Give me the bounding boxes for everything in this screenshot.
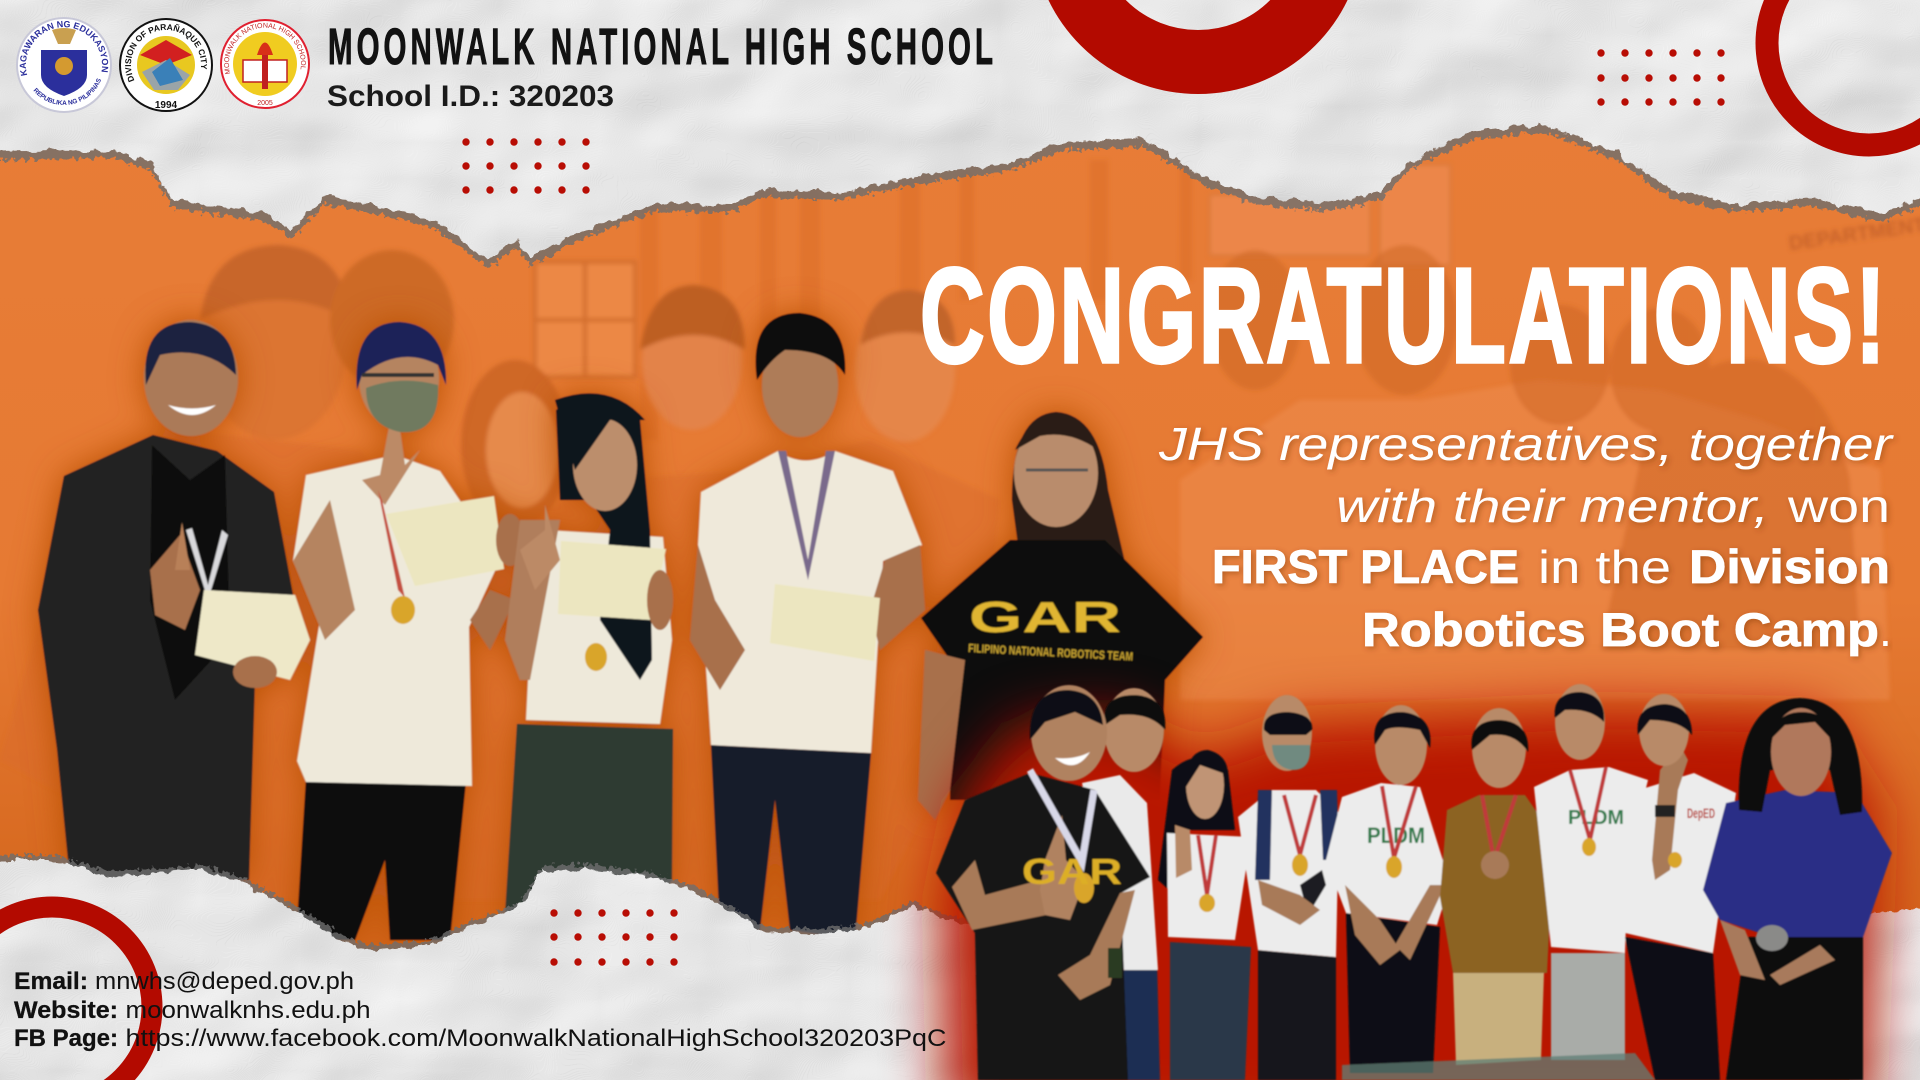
logo: DepEd seal xyxy=(16,17,112,113)
announcement text: in the xyxy=(1538,541,1671,593)
left photo: five winners with certificates xyxy=(38,313,1203,940)
contact information xyxy=(14,968,946,1052)
person: boy in brown shirt xyxy=(1440,708,1577,1065)
announcement text: JHS representatives, together xyxy=(1158,418,1894,470)
person: man in black jacket xyxy=(38,320,310,880)
contact information: https://www.facebook.com/MoonwalkNationalHighSchool320203PqC xyxy=(126,1025,946,1052)
person: boy with green mask and backpack xyxy=(1238,695,1339,1080)
header: school logos xyxy=(16,17,310,113)
logo: Division of Paranaque City seal xyxy=(119,18,213,112)
person: boy with mask xyxy=(293,322,524,940)
announcement text: with their mentor, xyxy=(1336,480,1769,532)
person: woman in black team shirt: FILIPINO NATIONAL ROBOTICS TEAM xyxy=(968,641,1133,664)
red dot grid: bottom xyxy=(550,909,678,966)
announcement text: . xyxy=(1879,604,1892,656)
contact information: Email: xyxy=(14,968,88,995)
person: girl in white shirt xyxy=(1158,750,1251,1080)
window xyxy=(535,262,635,377)
red dot grid: top left xyxy=(462,138,590,194)
person: boy with glasses, DepED shirt: DepED xyxy=(1687,805,1715,821)
school ID: School I.D.: 320203 xyxy=(327,80,614,113)
person: boy behind coach xyxy=(1082,688,1165,1080)
logo: Moonwalk NHS seal xyxy=(220,19,310,109)
curtains xyxy=(640,160,1192,440)
logo: Moonwalk NHS seal: 2005 xyxy=(257,100,273,107)
contact information: Website: xyxy=(14,997,118,1024)
red ring: top right xyxy=(1767,0,1920,145)
person: woman in black team shirt: GAR xyxy=(969,593,1121,642)
ghost right group xyxy=(1180,380,1890,700)
ghost background photo xyxy=(0,160,1920,900)
person: boy with PLDM shirt xyxy=(1326,705,1450,1073)
school name: MOONWALK NATIONAL HIGH SCHOOL xyxy=(328,18,997,75)
red dot grid: top right xyxy=(1597,49,1725,106)
paper: bottom torn strip xyxy=(0,855,1920,1080)
blinds xyxy=(1210,165,1450,265)
person: woman in black team shirt xyxy=(918,412,1203,820)
person: boy with PLDM shirt: PLDM xyxy=(1367,823,1425,848)
person: boy with PLDM shirt, grey pants xyxy=(1534,684,1648,1060)
person: coach in black team shirt xyxy=(936,685,1150,1080)
ghost head 4 xyxy=(640,285,745,430)
ghost head 2 xyxy=(330,250,454,390)
ghost bodies xyxy=(0,430,1000,900)
ghost head 5 xyxy=(855,290,955,442)
paper: top torn strip xyxy=(0,0,1920,268)
red glow behind the team photo xyxy=(940,710,1880,1080)
person: boy with glasses, DepED shirt xyxy=(1625,694,1736,1080)
team photo: nine people with medals xyxy=(936,684,1892,1080)
logo: DepEd seal: REPUBLIKA NG PILIPINAS xyxy=(34,78,101,105)
announcement text: FIRST PLACE xyxy=(1212,540,1519,593)
paper: bottom right corner xyxy=(1850,905,1920,1080)
announcement text: Robotics Boot Camp xyxy=(1362,603,1879,656)
glass table xyxy=(1342,1053,1655,1080)
person: teacher in blue blouse xyxy=(1703,698,1892,1080)
announcement text: Division xyxy=(1689,540,1890,593)
red ring: top centre xyxy=(1064,0,1332,62)
logo: Division of Paranaque City seal: 1994 xyxy=(155,100,178,111)
person: tall boy xyxy=(690,313,925,940)
ghost head 3 xyxy=(461,360,569,530)
red ring: bottom left xyxy=(0,907,152,1080)
person: girl with long hair xyxy=(504,393,673,940)
ghost people xyxy=(0,214,1920,900)
announcement text: won xyxy=(1787,480,1890,532)
announcement text xyxy=(1158,418,1894,656)
contact information: moonwalknhs.edu.ph xyxy=(126,997,370,1024)
logo: Division of Paranaque City seal: DIVISION OF PARAÑAQUE CITY xyxy=(125,24,207,82)
logo: Moonwalk NHS seal: MOONWALK NATIONAL HIGH SCHOOL xyxy=(224,22,306,74)
contact information: mnwhs@deped.gov.ph xyxy=(95,968,354,995)
person: boy with PLDM shirt, grey pants: PLDM xyxy=(1568,807,1624,829)
person: coach in black team shirt: GAR xyxy=(1022,851,1122,892)
contact information: FB Page: xyxy=(14,1025,118,1052)
ghost head 1 xyxy=(200,245,350,440)
logo: DepEd seal: KAGAWARAN NG EDUKASYON xyxy=(20,20,108,76)
